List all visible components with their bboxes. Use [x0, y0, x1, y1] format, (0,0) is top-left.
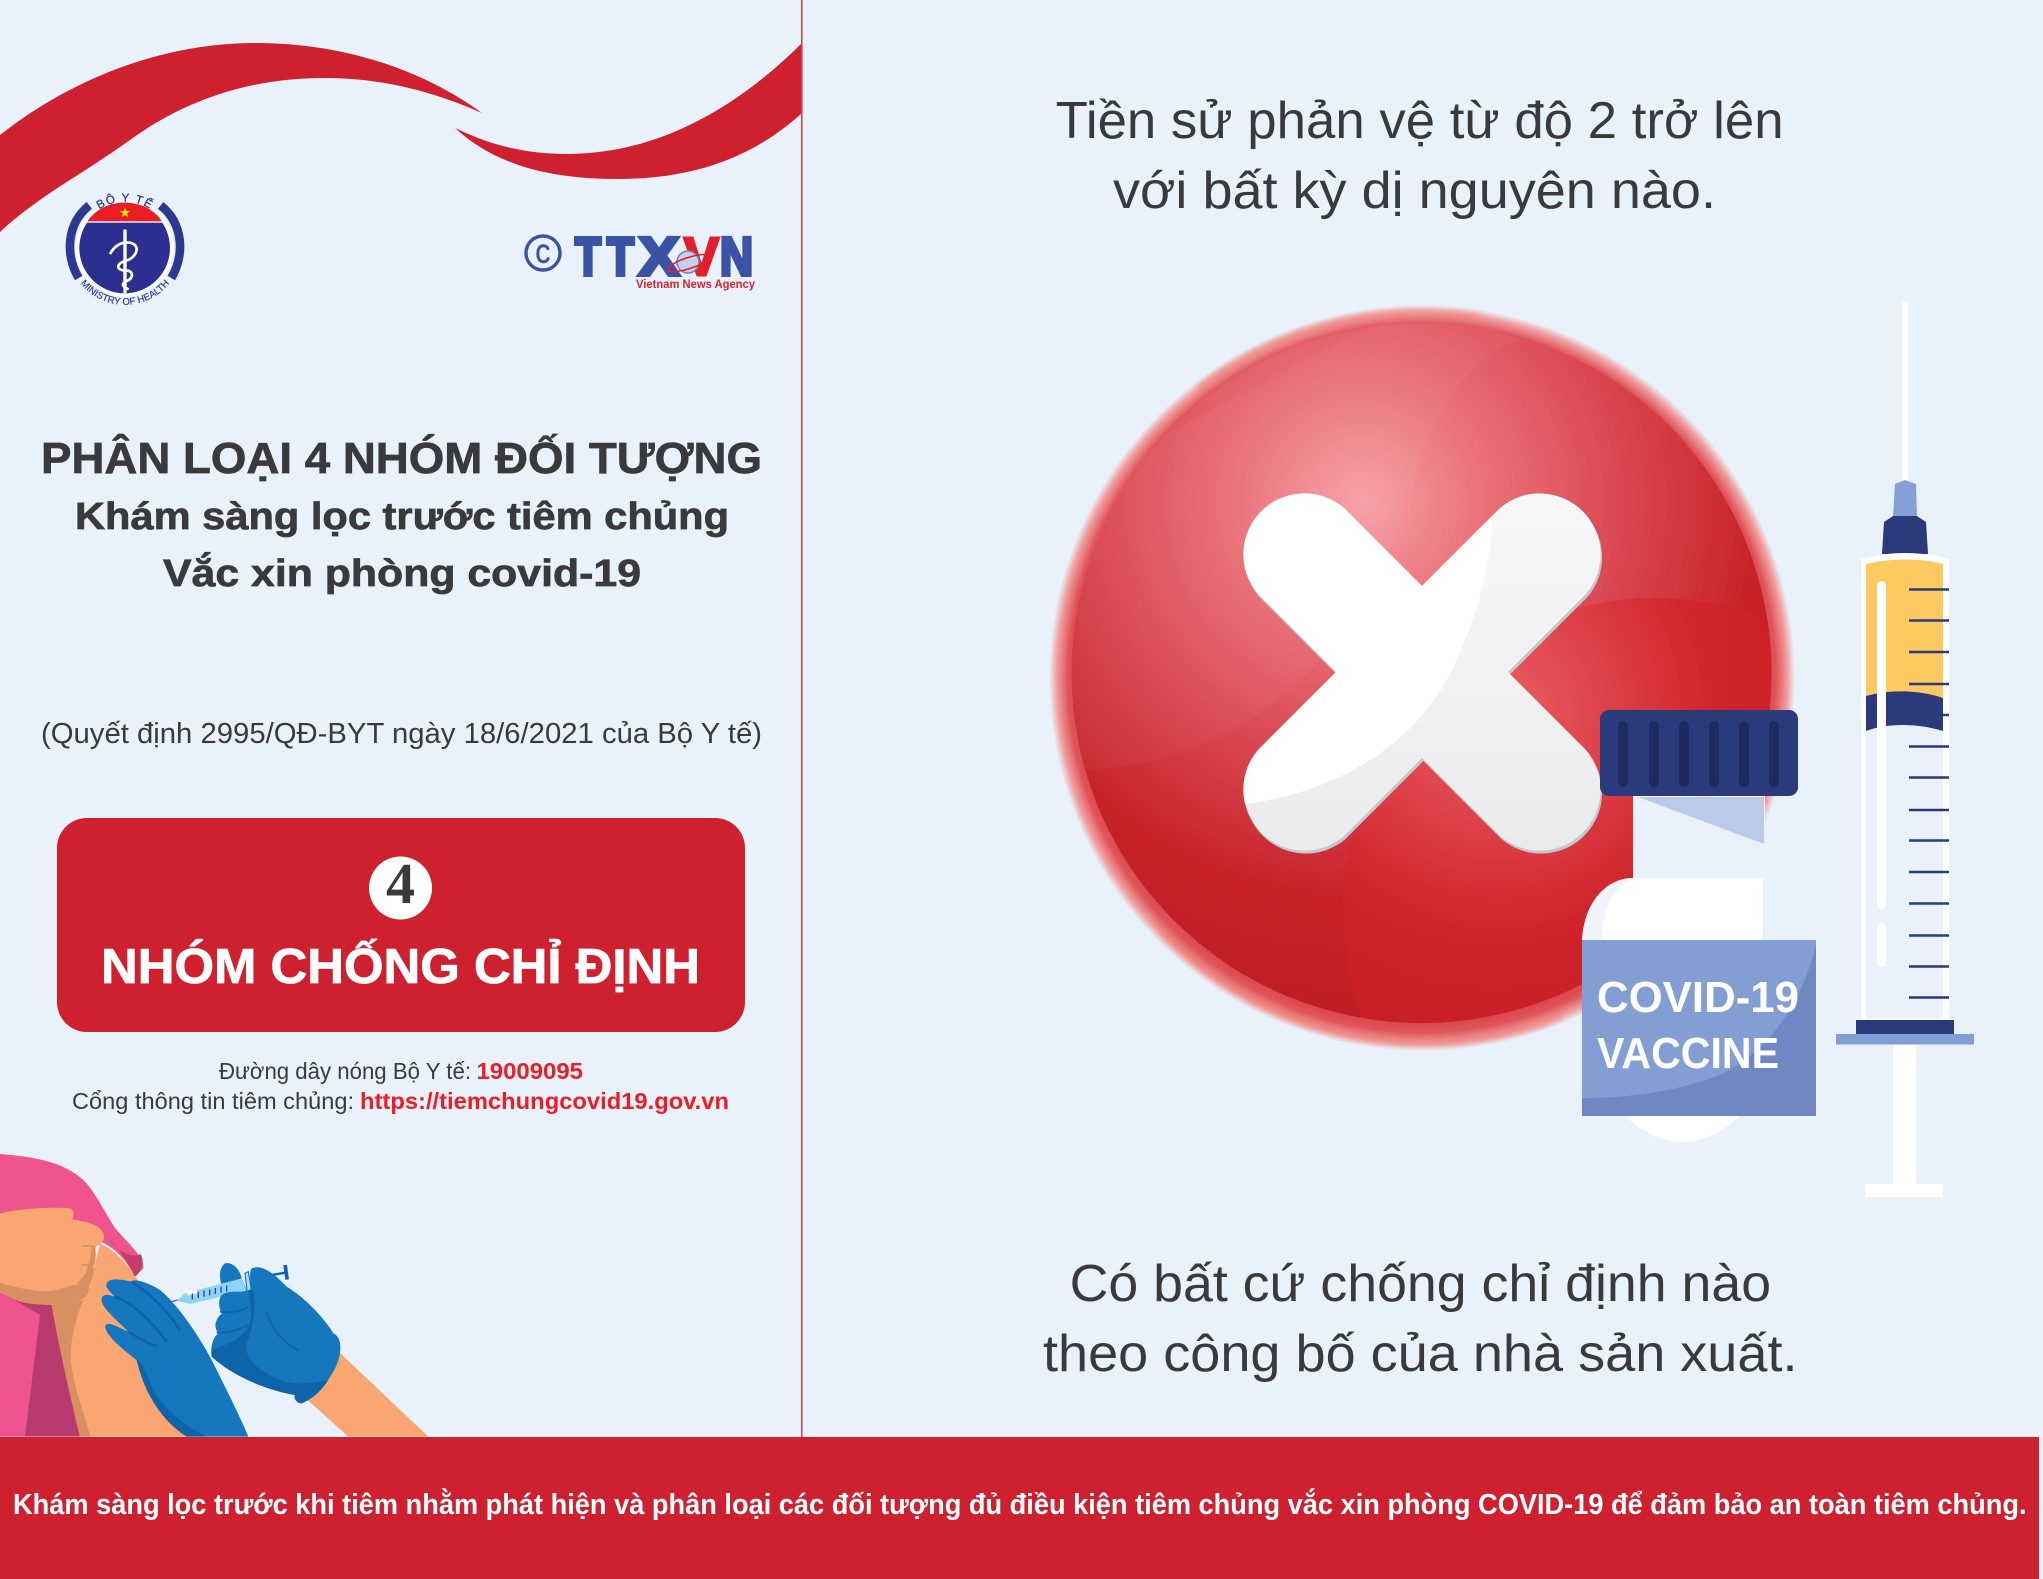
barrel highlights — [1877, 581, 1886, 909]
title block — [41, 432, 762, 595]
forearm — [300, 1347, 428, 1437]
plunger rod — [1893, 1044, 1916, 1184]
title line 3: Vắc xin phòng covid-19 — [163, 551, 641, 595]
title line 2: Khám sàng lọc trước tiêm chủng — [75, 496, 729, 538]
syringe — [172, 1265, 289, 1304]
hub — [1893, 480, 1917, 517]
cross — [1243, 493, 1601, 851]
cross highlight — [1243, 493, 1492, 804]
neck shading — [1638, 797, 1764, 844]
barrel interior — [1866, 560, 1943, 1018]
text: first contraindication: Tiền sử phản vệ từ độ 2 trở lên — [1056, 92, 1784, 150]
number 4: 4 — [386, 851, 415, 916]
disc highlights — [1248, 494, 1941, 1023]
upper arm — [52, 1243, 187, 1437]
text: second contraindication: Có bất cứ chống chỉ định nào — [1070, 1255, 1771, 1313]
right glove — [211, 1267, 340, 1403]
logo: Ministry of Health — [66, 193, 184, 305]
logo: TTXVN: T — [607, 227, 634, 287]
number circle — [369, 856, 432, 920]
logo: TTXVN: X — [639, 227, 679, 287]
logo: TTXVN: N — [720, 227, 753, 287]
flange — [1856, 1020, 1954, 1034]
logo: TTXVN: V — [684, 227, 719, 287]
logo: Ministry of Health: BỘ Y TẾ — [96, 193, 154, 209]
vial body — [1582, 878, 1763, 945]
decision reference: (Quyết định 2995/QĐ-BYT ngày 18/6/2021 của Bộ Y tế) — [41, 718, 762, 750]
needle — [1902, 302, 1908, 484]
ribbon: right wave — [455, 43, 802, 179]
vaccine liquid — [1866, 560, 1943, 698]
left glove — [102, 1279, 248, 1437]
text: first contraindication: với bất kỳ dị nguyên nào. — [1113, 162, 1716, 220]
plunger — [1866, 691, 1943, 731]
pink torso — [0, 1287, 57, 1437]
red disc — [1072, 323, 1772, 1023]
icon: syringe — [1836, 302, 1974, 1197]
hotline text: Đường dây nóng Bộ Y tế: — [219, 1058, 471, 1084]
sleeve — [0, 1154, 143, 1277]
cap — [1600, 710, 1798, 796]
icon: red cross button — [1050, 306, 1794, 1050]
gripping hand — [0, 1208, 104, 1305]
icon: vaccine vial — [1582, 710, 1816, 1142]
portal text — [72, 1088, 729, 1114]
cap ridges — [1618, 721, 1779, 787]
footer band — [0, 1437, 2039, 1579]
outer rim — [1049, 305, 1795, 1051]
logo: TTXVN: T — [575, 227, 601, 287]
tick marks — [1909, 590, 1949, 998]
group name: NHÓM CHỐNG CHỈ ĐỊNH — [101, 939, 700, 994]
hotline text: 19009095 — [476, 1058, 583, 1084]
panel: group 4 badge — [57, 818, 745, 1032]
portal text: Cổng thông tin tiêm chủng: — [72, 1088, 354, 1114]
text: first contraindication — [1056, 92, 1784, 220]
label — [1582, 940, 1816, 1116]
logo: TTXVN — [526, 227, 756, 291]
logo: TTXVN: Vietnam News Agency — [636, 279, 756, 291]
portal text: https://tiemchungcovid19.gov.vn — [360, 1088, 729, 1114]
cross shadow — [1245, 496, 1602, 854]
rim accents — [1160, 311, 1560, 1044]
logo: TTXVN: C — [536, 239, 550, 269]
thumb — [220, 1263, 248, 1293]
text: second contraindication — [1043, 1255, 1798, 1383]
logo: Ministry of Health: MINISTRY OF HEALTH — [80, 279, 170, 305]
barrel outline — [1861, 553, 1949, 1022]
text: second contraindication: theo công bố của nhà sản xuất. — [1043, 1325, 1798, 1383]
label text: COVID-19 — [1597, 973, 1799, 1022]
illustration: vaccination — [0, 1154, 428, 1437]
ribbon: left wave — [0, 43, 482, 232]
icon: vaccine vial: VACCINE — [1597, 1029, 1779, 1078]
vertical divider — [801, 0, 803, 1437]
title line 1: PHÂN LOẠI 4 NHÓM ĐỐI TƯỢNG — [41, 432, 762, 483]
vial neck — [1633, 790, 1765, 882]
